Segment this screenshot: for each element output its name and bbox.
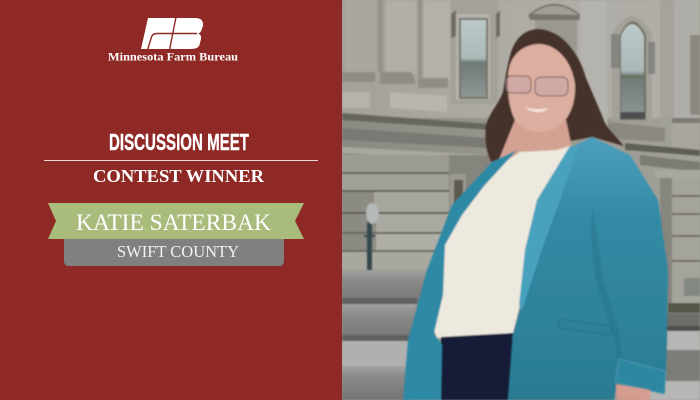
sleeve cuff [615, 359, 666, 394]
sleeve seam shading [592, 212, 618, 330]
ribbon shape [48, 203, 304, 239]
left window [451, 0, 498, 104]
subheading: Contest Winner: CONTEST WINNER [93, 166, 265, 186]
navy trousers [441, 333, 513, 400]
heading: Discussion Meet: DISCUSSION MEET [109, 129, 249, 155]
upper right pediment [528, 4, 582, 20]
street lamp [364, 203, 379, 270]
person [403, 29, 668, 400]
county plate [64, 239, 284, 266]
logo: Minnesota Farm Bureau [108, 17, 239, 64]
photo: winner in front of capitol building [342, 0, 700, 400]
carved frieze [342, 128, 490, 148]
arched window surround [612, 16, 652, 120]
county name: SWIFT COUNTY [117, 242, 239, 261]
right pilasters [672, 118, 700, 150]
panel: red background [0, 0, 342, 400]
right cornice and frieze [625, 143, 700, 156]
icon: FB mark [141, 17, 203, 50]
jacket left panel [403, 150, 517, 400]
arched window [620, 22, 646, 120]
right lower stones [660, 178, 672, 308]
plate background [64, 239, 284, 266]
logo wordmark: Minnesota Farm Bureau [108, 52, 239, 64]
photo base [342, 0, 700, 400]
jacket right body [508, 137, 668, 400]
building background [342, 0, 700, 313]
right stone pier [580, 0, 607, 130]
jacket pocket [559, 319, 611, 335]
balustrade [608, 122, 665, 142]
stone stairs [342, 270, 700, 400]
jacket lapel [519, 146, 578, 310]
hand [616, 384, 650, 400]
white blouse [434, 146, 570, 338]
divider line [44, 160, 318, 161]
hair [485, 29, 624, 163]
pilasters [345, 0, 375, 72]
neck [498, 120, 572, 162]
face [508, 44, 575, 132]
glasses [506, 76, 568, 96]
name ribbon [48, 203, 304, 239]
smile [524, 107, 549, 112]
winner name: KATIE SATERBAK [76, 210, 271, 236]
